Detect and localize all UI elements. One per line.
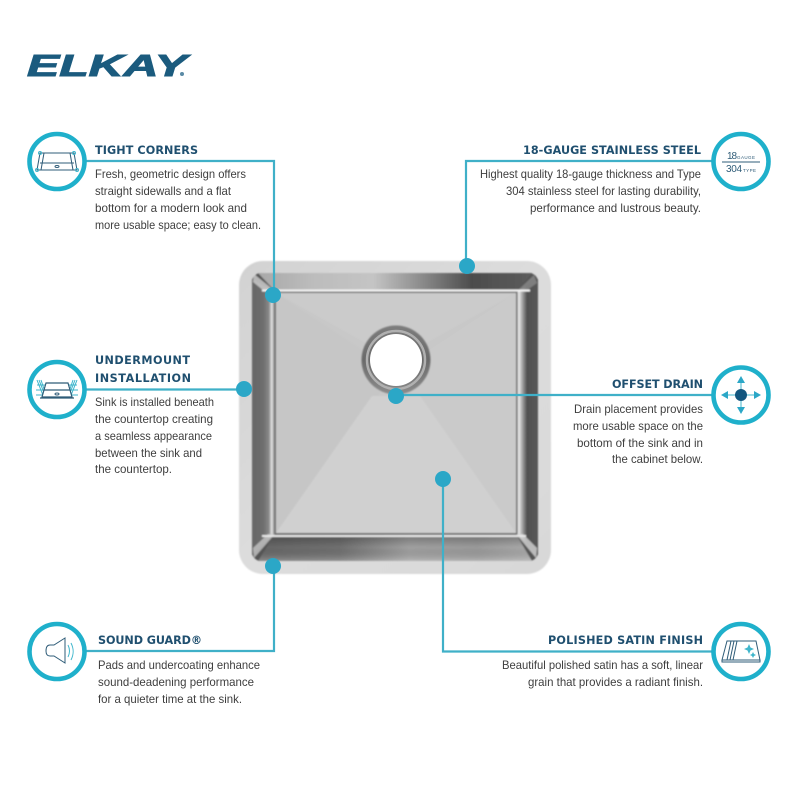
heading: sound guard: SOUND GUARD® [98, 634, 202, 647]
heading: undermount [95, 354, 191, 385]
icon: drain with arrows [714, 368, 768, 422]
text: offset drain: the cabinet below. [612, 453, 703, 466]
heading: 18-gauge: 18-GAUGE STAINLESS STEEL [523, 144, 701, 157]
panel: tight corners [30, 134, 281, 303]
panel: offset drain [388, 368, 768, 466]
panel: undermount installation [30, 354, 252, 476]
text: polished satin [502, 659, 703, 689]
text: sound guard [98, 659, 260, 706]
icon: gauge fraction: GAUGE [737, 155, 755, 160]
text: 18-gauge: Highest quality 18-gauge thickness and Type [480, 168, 701, 181]
marker: 18-gauge [459, 258, 475, 274]
connector: offset drain [396, 394, 713, 396]
text: tight corners: Fresh, geometric design offers [95, 168, 246, 181]
heading: tight corners: TIGHT CORNERS [95, 144, 198, 157]
heading: polished satin: POLISHED SATIN FINISH [548, 634, 703, 647]
connector: sound guard [85, 566, 274, 651]
text: offset drain [573, 403, 703, 466]
sink photo [239, 261, 551, 574]
text: tight corners: bottom for a modern look and [95, 202, 247, 215]
connector: undermount [85, 388, 244, 391]
text: sound guard: Pads and undercoating enhance [98, 659, 260, 672]
text: 18-gauge [480, 168, 701, 215]
icon: undermount sink [30, 362, 84, 417]
text: undermount: a seamless appearance [95, 430, 212, 443]
icon: sink corners [30, 134, 84, 189]
text: undermount: Sink is installed beneath [95, 396, 214, 409]
icon: satin sheet with sparkles [714, 624, 768, 679]
logo: Elkay [27, 49, 191, 83]
text: 18-gauge: 304 stainless steel for lasting durability, [506, 185, 701, 198]
icon: speaker [30, 624, 84, 679]
icon: gauge fraction: TYPE [743, 168, 756, 173]
marker: sound guard [265, 558, 281, 574]
text: tight corners [95, 168, 261, 232]
connector: polished satin [443, 479, 713, 652]
text: undermount: the countertop. [95, 463, 172, 476]
marker: undermount [236, 381, 252, 397]
text: sound guard: sound-deadening performance [98, 676, 254, 689]
text: undermount: the countertop creating [95, 413, 213, 426]
icon: gauge fraction: 18 [727, 151, 737, 162]
text: undermount [95, 396, 214, 476]
text: polished satin: Beautiful polished satin has a soft, linear [502, 659, 703, 672]
logo: Elkay: ELKAY [27, 49, 191, 83]
heading: undermount: INSTALLATION [95, 372, 191, 385]
marker: polished satin [435, 471, 451, 487]
text: 18-gauge: performance and lustrous beauty. [530, 202, 701, 215]
panel: sound guard [30, 558, 281, 706]
icon: gauge fraction: 304 [726, 164, 742, 175]
text: offset drain: bottom of the sink and in [577, 437, 703, 450]
marker: tight corners [265, 287, 281, 303]
text: offset drain: Drain placement provides [574, 403, 703, 416]
connector: tight corners [85, 161, 274, 295]
text: sound guard: for a quieter time at the sink. [98, 693, 242, 706]
panel: polished satin finish [435, 471, 768, 689]
marker: offset drain [388, 388, 404, 404]
text: offset drain: more usable space on the [573, 420, 703, 433]
heading: offset drain: OFFSET DRAIN [612, 378, 703, 391]
connector: 18-gauge [466, 161, 713, 266]
icon: gauge fraction [714, 134, 768, 189]
text: tight corners: more usable space; easy to clean. [95, 219, 261, 232]
heading: undermount: UNDERMOUNT [95, 354, 190, 367]
text: polished satin: grain that provides a radiant finish. [528, 676, 703, 689]
panel: 18-gauge stainless steel [459, 134, 768, 274]
text: tight corners: straight sidewalls and a flat [95, 185, 232, 198]
text: undermount: between the sink and [95, 447, 202, 460]
